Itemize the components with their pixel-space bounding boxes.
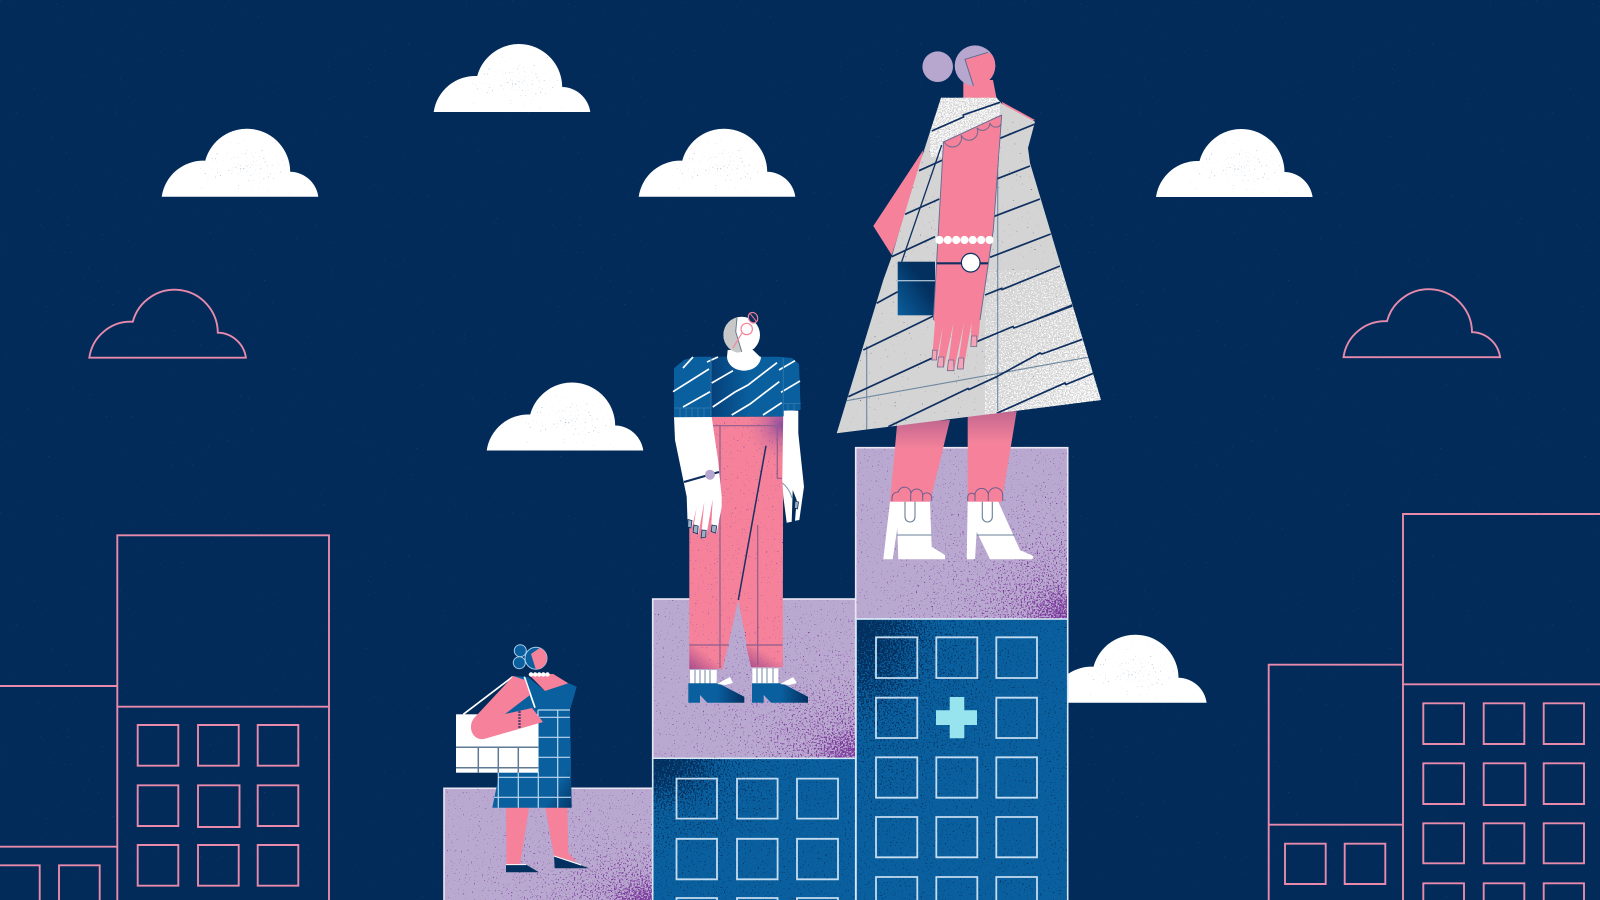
icon: medical cross bbox=[936, 697, 977, 738]
medium building: blue with windows bbox=[653, 758, 856, 900]
shoes bbox=[506, 856, 589, 872]
medium block: lavender rooftop bbox=[653, 599, 856, 758]
hospital building: blue with windows and cross bbox=[856, 619, 1068, 900]
small block: lavender rooftop bbox=[444, 788, 653, 900]
back shoulder bbox=[1002, 102, 1035, 128]
bracelet bbox=[518, 711, 521, 729]
arm bbox=[471, 676, 543, 739]
bracelet bbox=[684, 472, 719, 482]
white cloud: top centre bbox=[434, 42, 591, 112]
white cloud: upper middle bbox=[639, 127, 796, 197]
bag bbox=[456, 677, 538, 773]
outlined cloud: right bbox=[1344, 289, 1500, 357]
head bbox=[723, 312, 760, 352]
dress stripes bbox=[848, 102, 1093, 427]
outlined cloud: left bbox=[89, 290, 246, 358]
dress grain bbox=[835, 97, 1105, 437]
left arm and hand bbox=[674, 417, 722, 538]
white cloud: middle bbox=[487, 380, 644, 450]
pants bbox=[689, 417, 784, 669]
socks bbox=[690, 668, 778, 684]
neck bbox=[727, 350, 761, 371]
necklace bbox=[531, 672, 550, 677]
pearl bracelet bbox=[935, 236, 994, 244]
back arm bbox=[873, 150, 923, 255]
arm edge bbox=[933, 115, 1002, 320]
dress thin seams bbox=[847, 170, 1088, 430]
neck bbox=[963, 80, 997, 99]
outlined buildings: right bbox=[1269, 514, 1600, 900]
hair buns bbox=[513, 645, 526, 669]
boots bbox=[883, 487, 1033, 559]
head bbox=[954, 45, 996, 86]
shirt bbox=[673, 357, 801, 417]
shoulder bag bbox=[898, 262, 935, 315]
figure: middle woman in blue top bbox=[673, 311, 808, 703]
white cloud: upper left bbox=[162, 127, 319, 197]
dress with plaid bbox=[492, 676, 577, 808]
head bbox=[524, 646, 548, 670]
shoes bbox=[688, 677, 808, 703]
legs bbox=[506, 806, 577, 865]
wristwatch bbox=[937, 253, 988, 272]
glasses and hair tie bbox=[733, 333, 742, 348]
hair bun bbox=[922, 51, 953, 82]
tall block: lavender rooftop bbox=[856, 448, 1068, 619]
white cloud: upper right bbox=[1156, 127, 1313, 197]
figure: tall woman in grey dress bbox=[835, 45, 1105, 559]
sleeve scallops bbox=[944, 115, 1002, 147]
fingernails bbox=[932, 336, 977, 371]
front arm and hand bbox=[932, 115, 1002, 371]
figure: small woman with bag bbox=[456, 645, 589, 872]
legs bbox=[890, 411, 1017, 502]
outlined buildings: left bbox=[0, 535, 329, 900]
right arm and hand bbox=[782, 410, 804, 523]
bag strap bbox=[902, 145, 942, 262]
white cloud: behind hospital bbox=[1068, 634, 1207, 703]
dress bbox=[835, 97, 1105, 437]
neck and chest bbox=[528, 674, 568, 691]
